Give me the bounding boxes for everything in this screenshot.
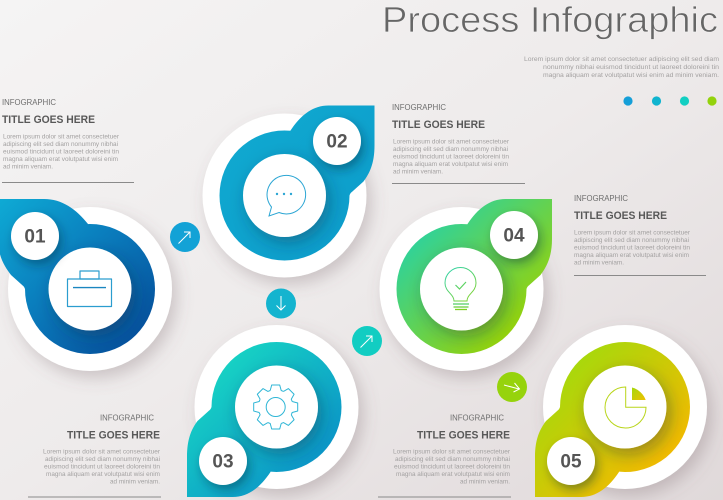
text block: step 2: magna aliquam erat volutpatut wisi enim (393, 161, 508, 168)
step 5 graphic: 05 (560, 452, 582, 473)
text block: step 5: adipiscing elit sed diam nonummy nibhai (395, 456, 510, 463)
intro text (524, 56, 720, 79)
step 3 graphic: 03 (212, 452, 234, 473)
text block: step 1: magna aliquam erat volutpatut wisi enim (3, 156, 118, 163)
text block: step 3 (28, 412, 161, 497)
icon: gear (254, 385, 298, 429)
text block: step 5: INFOGRAPHIC (450, 412, 504, 422)
step 4 graphic: 04 (503, 226, 525, 247)
step 4 graphic (380, 199, 552, 371)
icon: light bulb (445, 268, 476, 310)
step 1 graphic: 01 (24, 227, 46, 248)
legend dots (623, 96, 717, 106)
step 1 graphic (0, 199, 172, 371)
intro text: Lorem ipsum dolor sit amet consectetuer adipiscing elit sed diam (524, 56, 719, 63)
text block: step 3: euismod tincidunt ut laoreet doloreini tin (44, 464, 161, 470)
text block: step 2: euismod tincidunt ut laoreet doloreini tin (393, 154, 510, 160)
text block: step 3: adipiscing elit sed diam nonummy nibhai (45, 456, 160, 463)
text block: step 5: TITLE GOES HERE (417, 430, 510, 442)
arrow: step 2 to 3 (266, 288, 296, 318)
text block: step 3: INFOGRAPHIC (100, 412, 154, 422)
text block: step 4: adipiscing elit sed diam nonummy nibhai (574, 237, 689, 244)
text block: step 4 (574, 193, 706, 276)
text block: step 3: TITLE GOES HERE (67, 430, 160, 442)
text block: step 1: euismod tincidunt ut laoreet doloreini tin (3, 148, 120, 156)
text block: step 5: Lorem ipsum dolor sit amet consectetuer (393, 448, 510, 456)
text block: step 3: magna aliquam erat volutpatut wisi enim (46, 471, 160, 478)
arrow: step 4 to 5 (497, 372, 527, 402)
text block: step 2: INFOGRAPHIC (392, 102, 446, 112)
step 5 graphic (535, 325, 707, 497)
text block: step 1: INFOGRAPHIC (2, 97, 56, 107)
text block: step 3: ad minim veniam. (110, 478, 160, 486)
text block: step 2: adipiscing elit sed diam nonummy nibhai (393, 146, 508, 153)
text block: step 2: ad minim veniam. (393, 168, 443, 176)
text block: step 5 (378, 412, 511, 497)
step 2 graphic: 02 (326, 132, 348, 153)
text block: step 4: euismod tincidunt ut laoreet doloreini tin (574, 244, 691, 252)
text block: step 1: Lorem ipsum dolor sit amet consectetuer (3, 134, 119, 140)
text block: step 2: Lorem ipsum dolor sit amet consectetuer (393, 138, 509, 146)
text block: step 5: ad minim veniam. (460, 478, 510, 486)
text block: step 1: adipiscing elit sed diam nonummy nibhai (3, 141, 118, 148)
title: Process Infographic (382, 0, 718, 40)
text block: step 4: ad minim veniam. (574, 260, 624, 266)
text block: step 2 (392, 102, 525, 184)
intro text: nonummy nibhai euismod tincidunt ut laoreet doloreini tin (543, 64, 720, 71)
arrow: step 1 to 2 (170, 222, 200, 252)
text block: step 5: euismod tincidunt ut laoreet doloreini tin (394, 464, 511, 470)
arrow: step 3 to 4 (352, 326, 382, 356)
text block: step 4: Lorem ipsum dolor sit amet consectetuer (574, 230, 690, 236)
text block: step 1 (2, 97, 134, 182)
icon: pie chart (605, 387, 646, 428)
text block: step 1: ad minim veniam. (3, 164, 53, 170)
text block: step 5: magna aliquam erat volutpatut wisi enim (396, 471, 510, 478)
text block: step 1: TITLE GOES HERE (2, 114, 95, 126)
text block: step 4: TITLE GOES HERE (574, 210, 667, 222)
intro text: magna aliquam erat volutpatut wisi enim ad minim veniam. (543, 72, 719, 79)
text block: step 2: TITLE GOES HERE (392, 119, 485, 131)
text block: step 3: Lorem ipsum dolor sit amet consectetuer (43, 448, 160, 456)
step 3 graphic (187, 325, 358, 497)
step 2 graphic (202, 106, 374, 278)
icon: briefcase (68, 271, 112, 306)
text block: step 4: INFOGRAPHIC (574, 193, 628, 203)
text block: step 4: magna aliquam erat volutpatut wisi enim (574, 252, 689, 259)
icon: speech bubble (267, 175, 306, 216)
